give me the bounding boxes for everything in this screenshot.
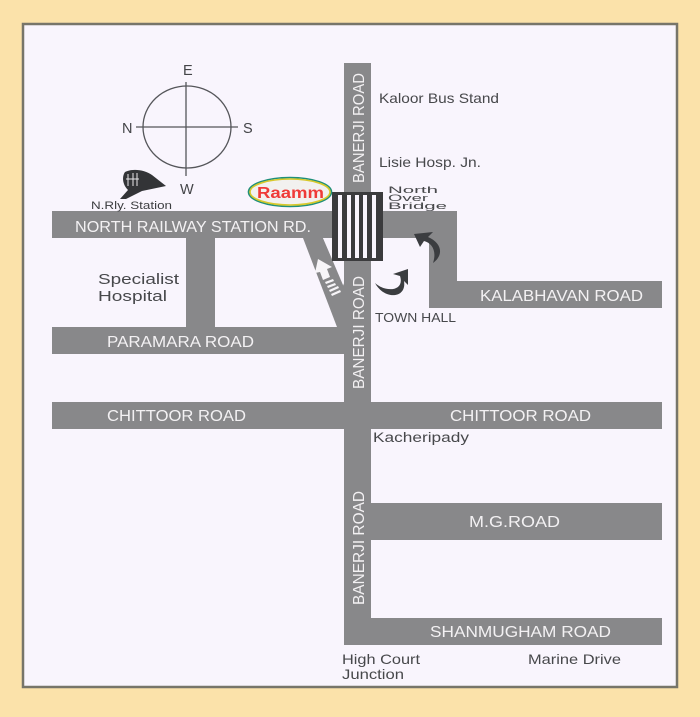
compass letters: N bbox=[122, 121, 132, 137]
label: Kaloor Bus Stand: Kaloor Bus Stand bbox=[379, 90, 499, 106]
logo: Raamm bbox=[248, 178, 332, 206]
label: Banerji Road south: BANERJI ROAD bbox=[351, 491, 368, 605]
label: North Over Bridge: North bbox=[388, 185, 438, 195]
label: North Over Bridge bbox=[388, 185, 447, 211]
road: Paramara Road bbox=[52, 327, 345, 354]
road: North Railway Station Rd bbox=[52, 211, 457, 308]
label: High Court Junction bbox=[342, 651, 420, 682]
icon: train bbox=[120, 170, 166, 199]
arrow: diagonal road direction bbox=[315, 259, 341, 296]
label: Specialist Hospital bbox=[98, 271, 180, 305]
label: High Court Junction: Junction bbox=[342, 666, 404, 682]
label: Shanmugham Road: SHANMUGHAM ROAD bbox=[430, 624, 611, 641]
road: connector to Paramara Road bbox=[186, 238, 215, 328]
arrow: curved up-left bbox=[414, 232, 440, 263]
label: Kacheripady: Kacheripady bbox=[373, 430, 469, 445]
logo: Raamm: Raamm bbox=[257, 185, 324, 202]
label: Banerji Road north: BANERJI ROAD bbox=[351, 73, 368, 183]
compass letters: S bbox=[243, 121, 253, 137]
compass letters bbox=[122, 63, 253, 198]
label: North Over Bridge: Over bbox=[388, 193, 428, 203]
road: Kalabhavan Road bbox=[429, 281, 662, 308]
label: Kalabhavan Road: KALABHAVAN ROAD bbox=[480, 288, 643, 305]
road: diagonal link bbox=[303, 238, 345, 327]
label: M.G. Road: M.G.ROAD bbox=[469, 514, 560, 531]
compass bbox=[136, 82, 238, 176]
arrow: curved right bbox=[375, 269, 408, 295]
road labels bbox=[75, 73, 643, 641]
over bridge bbox=[332, 192, 383, 261]
label: Lisie Hosp. Jn.: Lisie Hosp. Jn. bbox=[379, 154, 481, 170]
label: North Railway Station Rd: NORTH RAILWAY STATION RD. bbox=[75, 219, 311, 236]
label: Town Hall: TOWN HALL bbox=[375, 310, 456, 325]
label: Chittoor Road east: CHITTOOR ROAD bbox=[450, 408, 591, 425]
road: Chittoor Road bbox=[52, 402, 662, 429]
label: Banerji Road middle: BANERJI ROAD bbox=[351, 276, 368, 389]
label: Chittoor Road west: CHITTOOR ROAD bbox=[107, 408, 246, 425]
label: Paramara Road: PARAMARA ROAD bbox=[107, 334, 254, 351]
label: Specialist Hospital: Specialist bbox=[98, 271, 180, 288]
place labels bbox=[98, 90, 621, 682]
label: N.Rly. Station: N.Rly. Station bbox=[91, 200, 172, 212]
road: Shanmugham Road bbox=[344, 618, 662, 645]
road network bbox=[52, 63, 662, 645]
label: Specialist Hospital: Hospital bbox=[98, 288, 167, 305]
road: Banerji Road bbox=[344, 63, 371, 645]
label: North Over Bridge: Bridge bbox=[388, 201, 447, 211]
road: M.G. Road bbox=[371, 503, 662, 540]
label: High Court Junction: High Court bbox=[342, 651, 420, 667]
white gap beside diagonal road bbox=[323, 238, 343, 285]
label: Marine Drive: Marine Drive bbox=[528, 651, 621, 667]
compass letters: E bbox=[183, 63, 193, 79]
compass letters: W bbox=[180, 182, 194, 198]
